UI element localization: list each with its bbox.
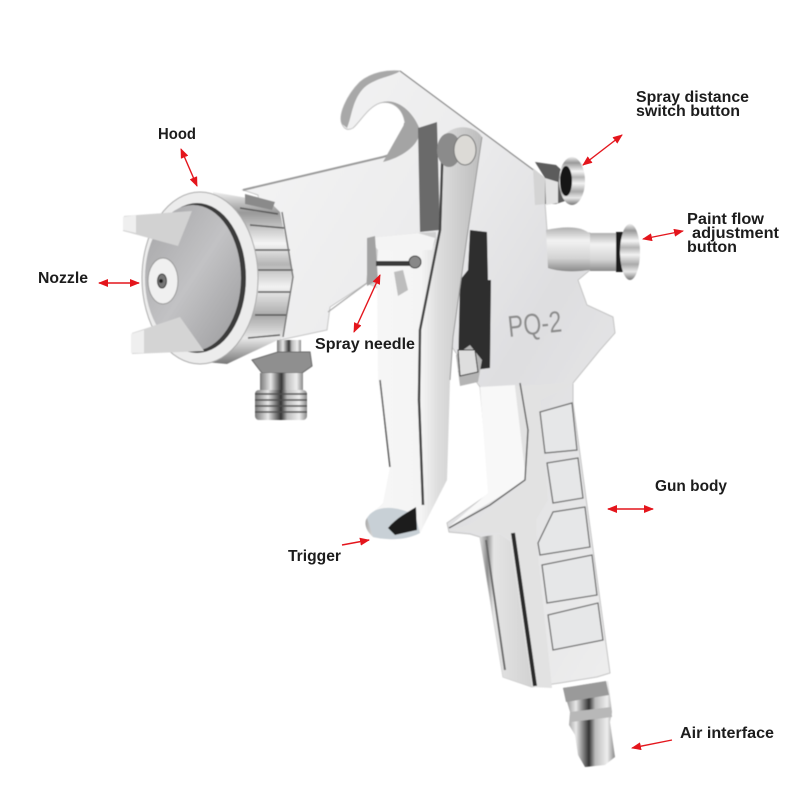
arrow: Spray needle [354, 275, 380, 332]
label: Paint flow adjustment button: button [687, 239, 737, 256]
label: Paint flow adjustment button [643, 211, 779, 256]
label: Hood [158, 126, 197, 186]
fluid inlet stem and thread [252, 340, 312, 420]
arrow: Gun body [608, 508, 653, 510]
window behind trigger [456, 230, 491, 386]
label: Air interface [632, 725, 774, 748]
label: Spray needle: Spray needle [315, 336, 415, 353]
label: Gun body [608, 478, 727, 509]
label: Paint flow adjustment button: Paint flow [687, 211, 765, 228]
knurled collar [205, 192, 293, 364]
upper adjustment knob [535, 157, 585, 205]
label: Spray needle [315, 275, 415, 353]
lower adjustment knob [546, 224, 640, 280]
label: Gun body: Gun body [655, 478, 727, 495]
air fitting [563, 681, 615, 767]
label: Paint flow adjustment button: adjustment [692, 225, 779, 242]
nozzle tip [148, 258, 178, 304]
label: Nozzle: Nozzle [38, 270, 88, 287]
arrow: Trigger [342, 540, 369, 545]
arrow: Spray distance switch button [583, 135, 622, 165]
trigger lever [365, 127, 482, 539]
label: Hood: Hood [158, 126, 196, 143]
gun body and handle [243, 71, 615, 688]
spray gun illustration [123, 71, 640, 767]
arrow: Hood [181, 149, 197, 186]
arrow: Air interface [632, 740, 672, 748]
grip panels [538, 403, 603, 650]
label: Spray distance switch button: switch button [636, 103, 740, 120]
arrow: Paint flow adjustment button [643, 231, 683, 239]
label: Spray distance switch button: Spray distance [636, 89, 749, 106]
label: Trigger [288, 540, 369, 565]
label: Spray distance switch button [583, 89, 749, 165]
hood ring [142, 192, 258, 364]
label: Nozzle [38, 270, 139, 287]
label: Trigger: Trigger [288, 548, 341, 565]
arrow: Nozzle [99, 282, 139, 284]
label: Air interface: Air interface [680, 725, 774, 742]
hood ears [123, 211, 204, 354]
model mark PQ-2: PQ-2 [506, 305, 563, 344]
trigger pivot pin [437, 133, 476, 167]
spray needle mechanism [367, 233, 435, 296]
